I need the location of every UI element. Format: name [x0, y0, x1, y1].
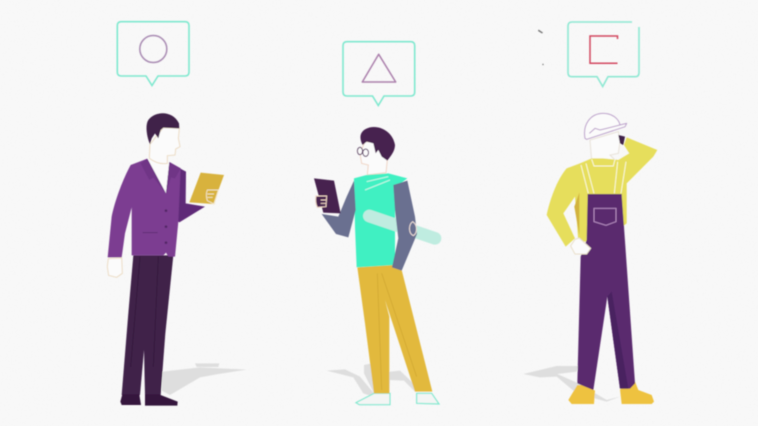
hair: [360, 127, 395, 161]
collar: [592, 159, 615, 166]
shoes: [120, 394, 178, 406]
figure: construction worker on phone: [523, 113, 657, 404]
pocket: [594, 208, 616, 225]
speech bubble: circle: [117, 22, 189, 86]
waist hand: [571, 238, 591, 254]
tube: [369, 216, 435, 238]
jacket buttons: [143, 209, 167, 244]
figure: man with glasses, tablet and tube: [314, 127, 439, 405]
speech bubble: unfinished square: [568, 22, 639, 86]
reading hand: [206, 190, 218, 204]
trouser creases: [131, 257, 158, 367]
shadow: [162, 363, 247, 395]
helmet: [585, 113, 627, 139]
helmet brim detail: [589, 125, 620, 133]
jacket: [108, 159, 181, 257]
vest collar: [365, 177, 390, 190]
tablet hand: [316, 196, 327, 207]
face and neck: [149, 128, 180, 164]
glasses: [357, 147, 368, 156]
left sleeve: [322, 181, 356, 237]
shirt: [147, 157, 169, 195]
figure: man in purple suit reading: [107, 113, 247, 406]
vest: [354, 173, 407, 267]
trousers: [122, 255, 173, 395]
speech bubble: triangle: [343, 42, 415, 106]
phone hand: [618, 135, 625, 145]
book: [189, 173, 224, 204]
trousers: [357, 264, 432, 393]
overall straps: [581, 162, 626, 193]
underarm shade: [574, 193, 579, 235]
shadow: [327, 363, 415, 397]
face and neck: [590, 132, 620, 160]
right sleeve: [392, 181, 417, 271]
shadow: [523, 366, 620, 402]
trouser creases: [377, 273, 417, 390]
overalls: [577, 194, 635, 390]
boots: [568, 382, 654, 404]
paper specks: [538, 30, 544, 65]
inner leg shade: [607, 292, 628, 389]
shoes: [356, 393, 439, 405]
hand: [107, 258, 122, 277]
lapels: [141, 159, 181, 193]
tablet: [314, 178, 341, 213]
shirt: [547, 137, 657, 247]
hand on tube: [409, 222, 416, 236]
face and neck: [360, 142, 387, 175]
far arm: [176, 168, 205, 222]
hair: [147, 113, 179, 144]
